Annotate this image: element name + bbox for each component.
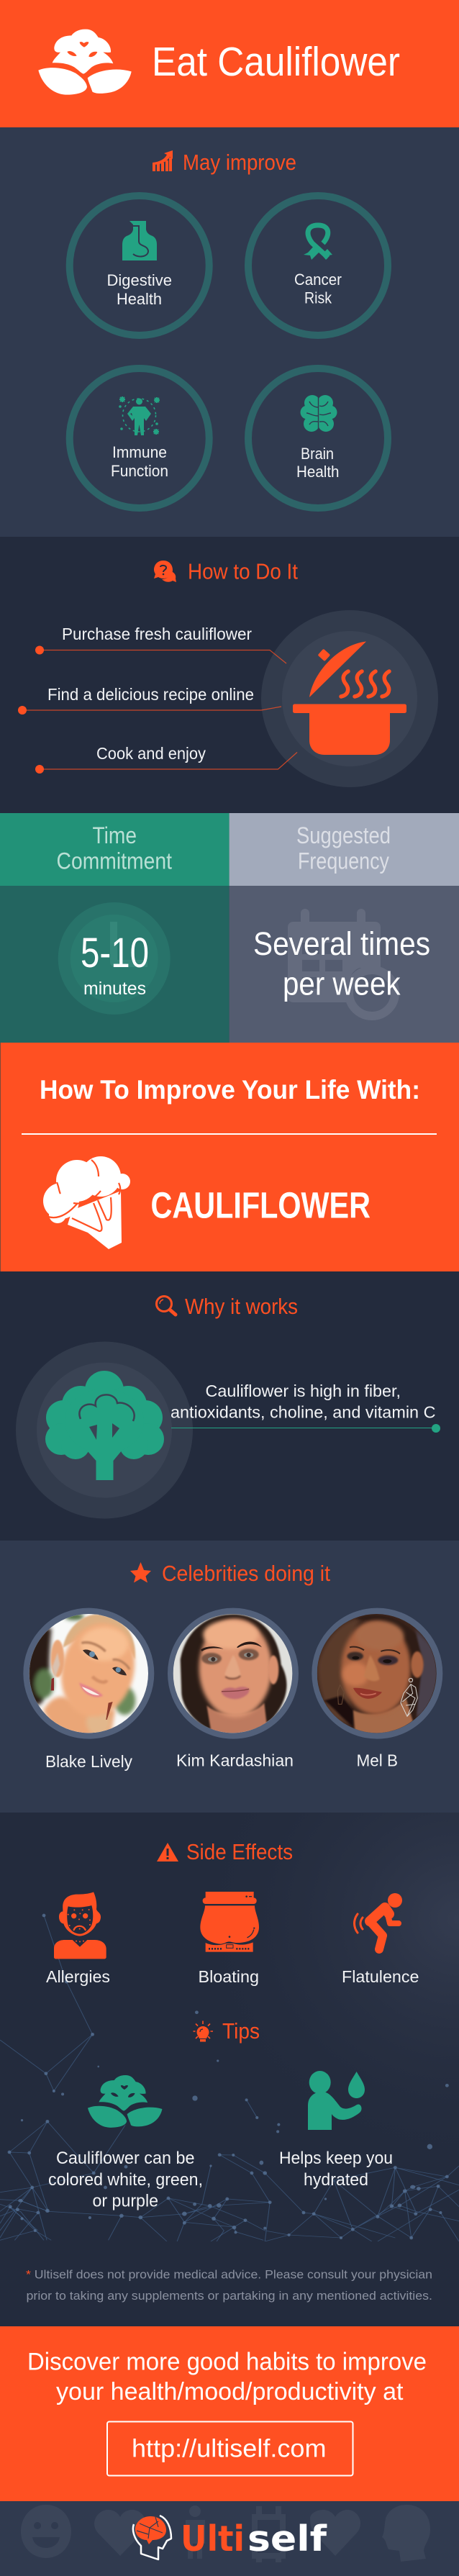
step 3: Cook and enjoy <box>96 744 206 763</box>
step 3 <box>35 744 297 774</box>
heading: how to do it: How to Do It <box>188 558 298 584</box>
heading: celebrities doing it: Celebrities doing it <box>162 1561 330 1586</box>
labels: side effects: Allergies <box>46 1967 110 1986</box>
icon: question bubbles <box>154 561 176 582</box>
icon: warning triangle <box>157 1843 178 1861</box>
names <box>45 1751 398 1771</box>
label: cancer risk <box>294 271 342 307</box>
label: immune function <box>111 443 168 480</box>
text: tip two: Helps keep you <box>279 2149 393 2168</box>
step 1: Purchase fresh cauliflower <box>62 625 252 643</box>
names: Blake Lively <box>45 1752 132 1771</box>
footer <box>0 2501 459 2576</box>
step 2: Find a delicious recipe online <box>47 685 254 704</box>
text: tip two: hydrated <box>304 2170 368 2190</box>
portrait: blake lively <box>27 1611 151 1739</box>
heading: suggested frequency: Frequency <box>298 848 389 874</box>
label: digestive health <box>106 271 172 308</box>
disclaimer: prior to taking any supplements or partaking in any mentioned activities. <box>26 2289 432 2303</box>
label: immune function: Immune <box>112 443 167 461</box>
ring: cancer risk <box>248 196 388 335</box>
label: immune function: Function <box>111 462 168 480</box>
icon: magnifier <box>157 1297 176 1315</box>
label: cancer risk: Risk <box>304 289 332 307</box>
icon: allergies <box>54 1892 106 1959</box>
icon: white cauliflower <box>38 30 132 95</box>
heading: tips: Tips <box>222 2018 260 2044</box>
panel: how to do it <box>0 537 459 813</box>
portrait: mel b <box>315 1611 440 1739</box>
text: discover more <box>27 2349 427 2405</box>
label: digestive health: Digestive <box>106 271 172 289</box>
ring: immune function <box>70 368 209 508</box>
value: 5-10 minutes <box>81 930 149 999</box>
step 1 <box>35 625 286 663</box>
icon: flatulence <box>354 1893 402 1949</box>
text: tip one: or purple <box>92 2192 158 2210</box>
heading: time commitment <box>56 822 172 874</box>
label: brain health: Health <box>296 463 340 481</box>
panel: suggested frequency <box>230 813 459 1043</box>
broccoli badge <box>16 1341 193 1518</box>
ring: brain health <box>248 368 388 508</box>
value: several times per week <box>253 925 430 1002</box>
header banner <box>0 0 459 127</box>
step 2 <box>18 685 281 715</box>
logo: Ulti <box>181 2518 245 2559</box>
icon: pot with lid and steam <box>293 642 406 755</box>
text: why it works <box>171 1382 436 1422</box>
text: tip two <box>279 2149 393 2190</box>
icon: light bulb <box>193 2021 213 2042</box>
heading: how to improve: How To Improve Your Life With: <box>40 1075 420 1105</box>
disclaimer: * Ultiself does not provide medical advice. Please consult your physician <box>26 2268 432 2281</box>
text: discover more: Discover more good habits to improve <box>27 2349 427 2376</box>
title: Eat Cauliflower <box>152 39 400 85</box>
icon: person with water drop <box>308 2071 365 2130</box>
disclaimer <box>26 2268 432 2303</box>
panel: time commitment <box>0 813 230 1043</box>
text: tip one <box>48 2149 203 2210</box>
label: brain health <box>296 445 340 481</box>
icon: green broccoli tree <box>45 1371 164 1480</box>
heading: side effects: Side Effects <box>186 1839 293 1864</box>
names: Mel B <box>357 1751 398 1770</box>
heading: suggested frequency: Suggested <box>296 822 391 848</box>
portrait: kim kardashian <box>171 1611 296 1736</box>
icon: rising chart <box>153 150 173 171</box>
icon: brain <box>301 395 337 432</box>
label: digestive health: Health <box>117 290 162 308</box>
text: why it works: Cauliflower is high in fiber, <box>206 1382 401 1400</box>
icon: digestive torso <box>122 221 157 260</box>
text: tip one: Cauliflower can be <box>56 2149 194 2168</box>
logo: self <box>247 2518 327 2559</box>
label: cancer risk: Cancer <box>294 271 342 289</box>
ring: digestive health <box>70 196 209 335</box>
value: 5-10 minutes: minutes <box>83 979 146 999</box>
heading: time commitment: Commitment <box>56 848 172 874</box>
icon: ghost calendar <box>288 909 395 1016</box>
panel: celebrities <box>0 1541 459 1813</box>
text: why it works: antioxidants, choline, and vitamin C <box>171 1403 436 1422</box>
heading: may improve: May improve <box>183 150 296 175</box>
url button <box>107 2422 353 2475</box>
ghost icons <box>21 2505 430 2562</box>
icon: green cauliflower <box>88 2075 162 2128</box>
label: brain health: Brain <box>301 445 334 463</box>
icon: white broccoli <box>43 1156 130 1249</box>
panel: why it works <box>0 1271 459 1541</box>
text: discover more: your health/mood/productivity at <box>56 2378 404 2405</box>
url button: http://ultiself.com <box>132 2435 327 2462</box>
logo <box>133 2516 327 2559</box>
heading: time commitment: Time <box>92 822 137 848</box>
panel: call to action <box>0 2326 459 2501</box>
icon: immune figure <box>119 396 160 435</box>
icon: ribbon <box>304 225 332 260</box>
connector line <box>171 1424 440 1433</box>
names: Kim Kardashian <box>176 1751 294 1770</box>
icon: bloating <box>200 1892 259 1952</box>
panel: side effects and tips background <box>0 1813 459 2326</box>
labels: side effects: Flatulence <box>342 1967 419 1986</box>
heading: why it works: Why it works <box>185 1294 298 1319</box>
pot badge <box>261 610 438 787</box>
panel: may improve <box>0 127 459 537</box>
icon: star <box>130 1562 151 1583</box>
banner: how to improve your life with cauliflower <box>0 1043 459 1271</box>
heading: suggested frequency <box>296 822 391 874</box>
labels: side effects <box>46 1967 419 1986</box>
value: several times per week: per week <box>283 966 401 1002</box>
clock badge <box>58 902 171 1015</box>
labels: side effects: Bloating <box>199 1967 259 1986</box>
value: several times per week: Several times <box>253 925 430 962</box>
heading: cauliflower: CAULIFLOWER <box>151 1184 371 1226</box>
text: tip one: colored white, green, <box>48 2170 203 2190</box>
value: 5-10 minutes: 5-10 <box>81 930 149 976</box>
